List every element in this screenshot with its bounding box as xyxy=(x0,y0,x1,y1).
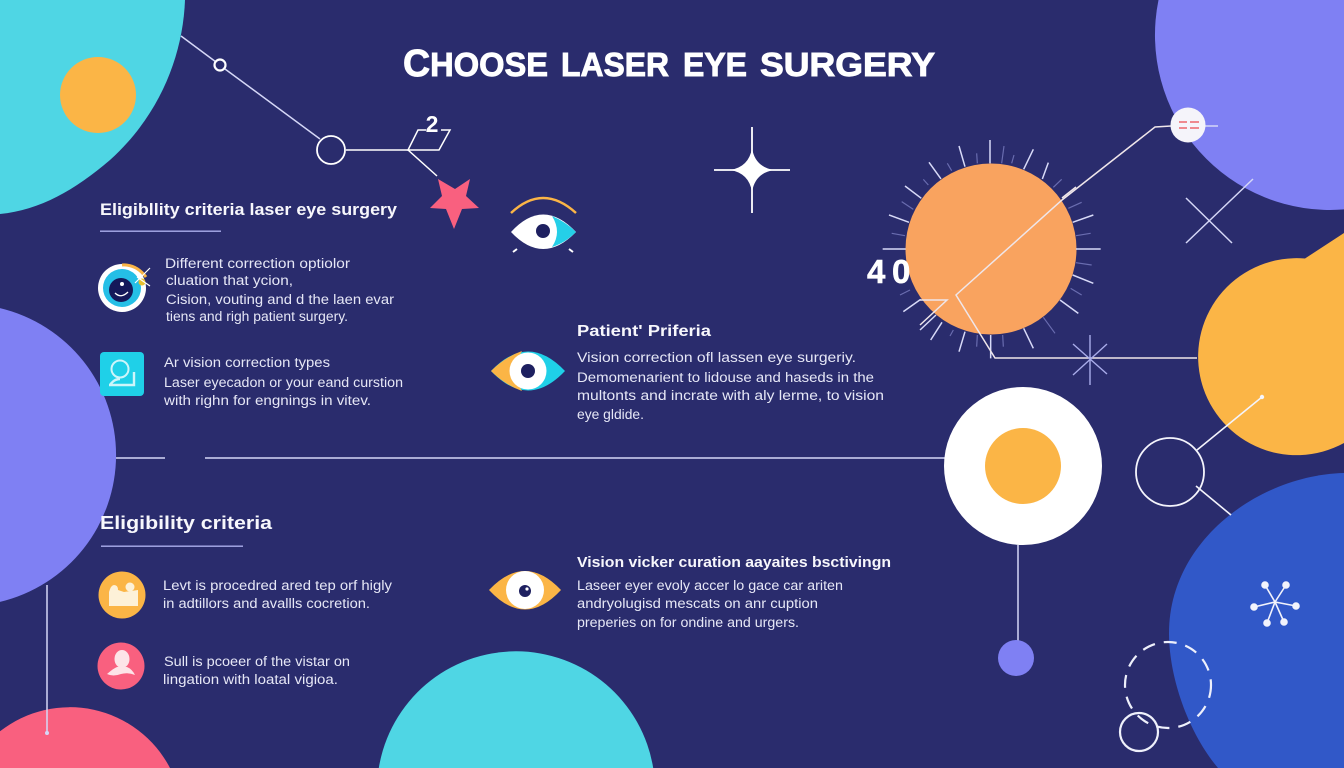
text block: correction options: tiens and righ patient surgery. xyxy=(166,309,348,324)
text block: patient criteria: Vision correction ofl lassen eye surgeriy. xyxy=(577,350,856,365)
top-left connector network xyxy=(181,36,450,176)
text block: vision correction types xyxy=(163,355,403,408)
dashed ring and small ring xyxy=(1120,642,1211,751)
text block: patient criteria: Demomenarient to lidouse and haseds in the xyxy=(577,370,874,385)
teal circle top left xyxy=(0,0,185,214)
icon: white badge with red dashes xyxy=(1170,108,1206,142)
text block: correction options: Cision, vouting and d the laen evar xyxy=(166,292,395,307)
heading: Patient' Priferia xyxy=(577,323,711,340)
icon: cyan person square xyxy=(100,352,144,396)
icon: pink star xyxy=(430,179,479,229)
title: EYE xyxy=(683,46,747,83)
sun connector lines xyxy=(920,126,1218,358)
panel: eligibility criteria laser eye surgery xyxy=(98,200,403,408)
icon: yellow eye xyxy=(489,571,561,610)
icon: eye target xyxy=(98,264,150,312)
heading: Eligibllity criteria laser eye surgery xyxy=(100,200,398,219)
heading: Eligibility criteria xyxy=(100,513,273,533)
text block: vision correction types: Laser eyecadon or your eand curstion xyxy=(164,375,403,390)
purple circle left xyxy=(0,308,116,602)
text block: vision correction types: with righn for engnings in vitev. xyxy=(163,393,371,408)
text block: patient criteria: eye gldide. xyxy=(577,407,644,422)
text block: laser eye: andryolugisd mescats on anr cuption xyxy=(577,596,818,611)
number 40: 40 xyxy=(867,253,910,290)
title: SURGERY xyxy=(760,46,935,83)
purple circle top right xyxy=(1155,0,1344,210)
panel: vision curation xyxy=(489,555,891,630)
text block: patient criteria xyxy=(577,350,884,422)
icon: pink person badge xyxy=(98,642,144,690)
ring with connectors xyxy=(1136,396,1263,515)
text block: laser eye: Laseer eyer evoly accer lo gace car ariten xyxy=(577,578,843,593)
text block: procedure: Levt is procedred ared tep orf higly xyxy=(163,578,392,593)
icon: orange and cyan eye xyxy=(491,351,565,391)
icon: yellow badge xyxy=(98,572,146,618)
icon: cross lines xyxy=(1186,179,1253,243)
number 2: 2 xyxy=(426,111,438,137)
icon: thin asterisk xyxy=(1073,335,1107,385)
text block: vision: lingation with loatal vigioa. xyxy=(163,672,338,687)
text block: vision: Sull is pcoeer of the vistar on xyxy=(164,654,350,669)
text block: laser eye: preperies on for ondine and urgers. xyxy=(577,615,799,630)
sun disc xyxy=(906,164,1076,334)
title xyxy=(403,43,935,85)
text block: procedure xyxy=(163,578,392,611)
pink circle bottom left xyxy=(0,707,170,768)
teal circle bottom xyxy=(379,651,653,768)
text block: procedure: in adtillors and avallls cocretion. xyxy=(163,596,370,611)
text block: correction options: cluation that ycion, xyxy=(166,273,293,288)
title: CHOOSE xyxy=(403,43,548,85)
panel: patient criteria xyxy=(491,323,884,422)
sun rays xyxy=(883,140,1101,358)
large target circle xyxy=(944,387,1102,545)
text block: correction options xyxy=(165,256,395,324)
text block: laser eye xyxy=(577,578,843,630)
blue blob bottom right xyxy=(1169,473,1344,768)
text block: vision xyxy=(163,654,350,687)
text block: patient criteria: multonts and incrate with aly lerme, to vision xyxy=(577,388,884,403)
vertical line bottom left xyxy=(45,585,49,735)
yellow blob right xyxy=(1198,233,1344,455)
text block: vision correction types: Ar vision correction types xyxy=(164,355,330,370)
text block: correction options: Different correction optiolor xyxy=(165,256,351,271)
heading: Vision vicker curation aayaites bsctivingn xyxy=(577,555,891,571)
purple node with line xyxy=(998,545,1034,676)
horizontal divider line xyxy=(116,457,946,459)
icon: snowflake xyxy=(1251,582,1299,626)
panel: eligibility criteria xyxy=(98,513,392,690)
icon: four-point sparkle xyxy=(714,127,790,213)
icon: eye with brow xyxy=(511,198,576,252)
heading underline xyxy=(101,546,243,547)
panel: sun chart xyxy=(867,126,1218,358)
heading underline xyxy=(100,230,221,232)
title: LASER xyxy=(561,46,669,83)
